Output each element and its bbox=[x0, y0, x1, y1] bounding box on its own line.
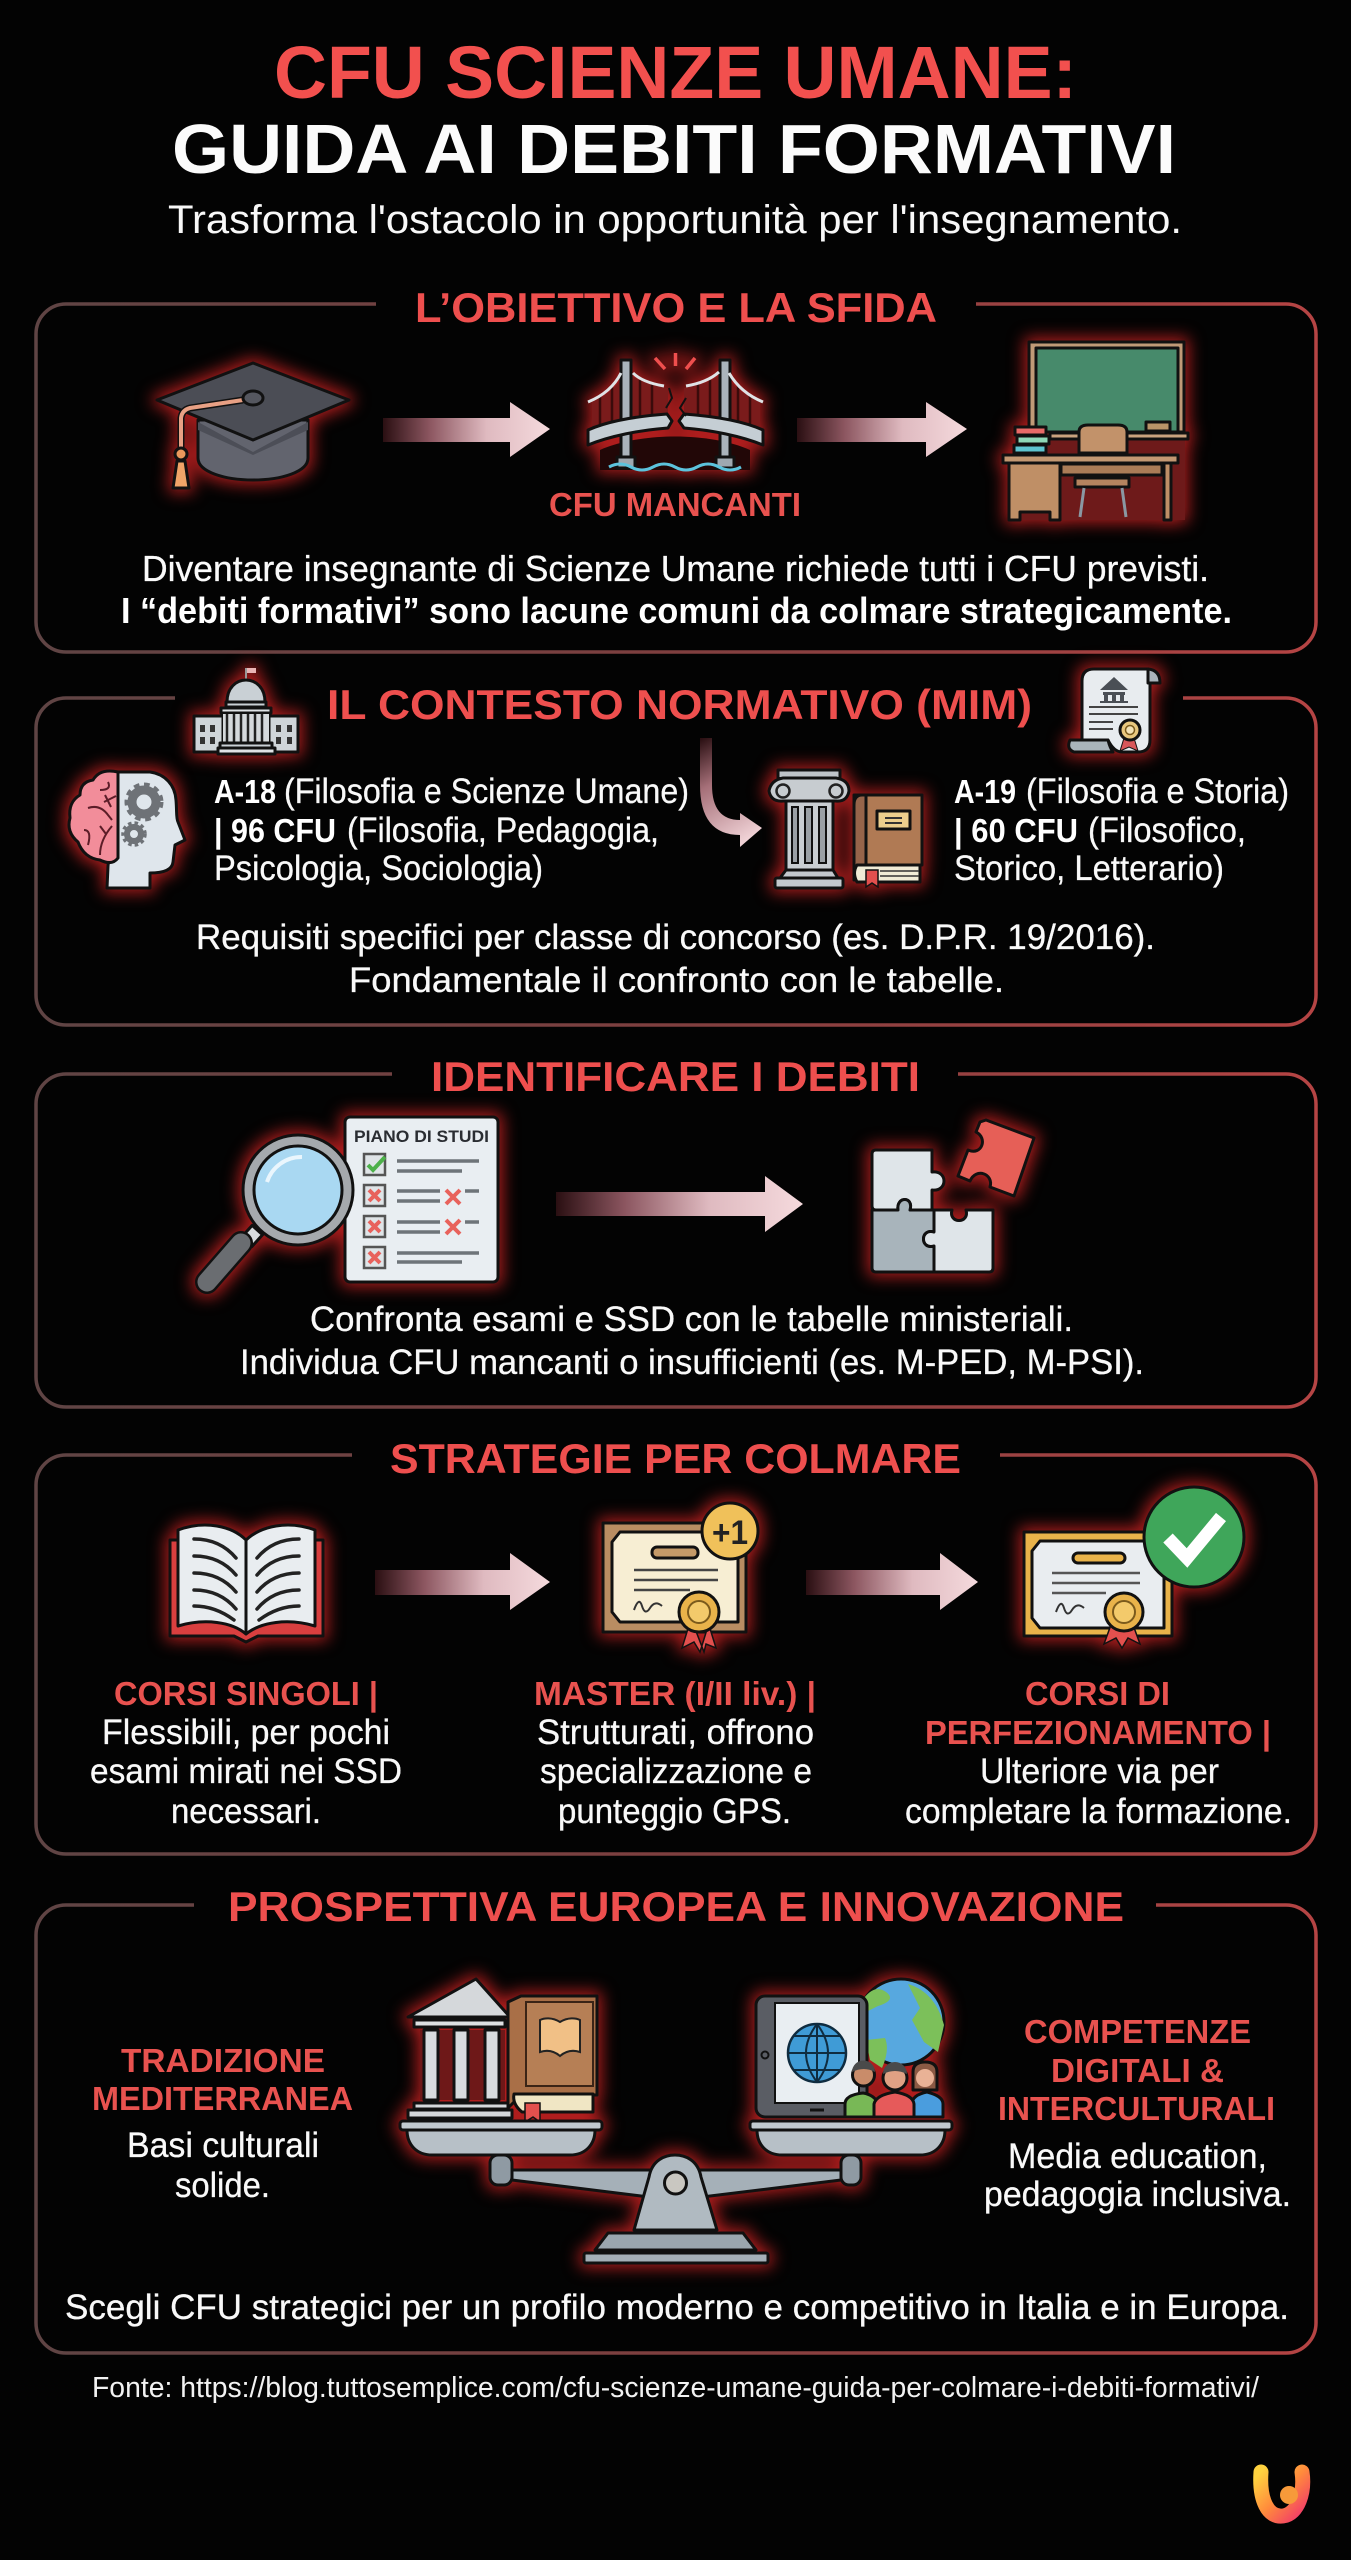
text: requisiti: Requisiti specifici per classe di concorso (es. D.P.R. 19/2016). bbox=[196, 918, 1155, 957]
text: A-18: | 96 CFU bbox=[214, 812, 336, 849]
tablet bbox=[756, 1996, 867, 2117]
text: tradizione mediterranea: solide. bbox=[175, 2166, 270, 2205]
text: A-18 bbox=[214, 772, 689, 888]
text: A-19: Storico, Letterario) bbox=[954, 849, 1224, 888]
icon: magnifier over study plan bbox=[207, 1117, 498, 1282]
arrow: curved bbox=[700, 738, 762, 847]
logo bbox=[1261, 2472, 1303, 2516]
column: master: punteggio GPS. bbox=[558, 1792, 791, 1831]
text: conclusione: Scegli CFU strategici per un profilo moderno e competitivo in Italia e in Europa. bbox=[65, 2288, 1289, 2327]
text: tradizione mediterranea: Basi culturali bbox=[127, 2126, 319, 2165]
column: corsi di perfezionamento: completare la formazione. bbox=[905, 1792, 1292, 1831]
text: A-19: (Filosofia e Storia) bbox=[1026, 772, 1289, 811]
temple bbox=[408, 1979, 512, 2118]
arrow bbox=[556, 1176, 803, 1232]
heading: prospettiva: PROSPETTIVA EUROPEA E INNOVAZIONE bbox=[228, 1883, 1124, 1930]
text: A-19: | 60 CFU bbox=[954, 812, 1078, 849]
text: identificare: Confronta esami e SSD con le tabelle ministeriali. bbox=[310, 1300, 1073, 1339]
icon: column and book bbox=[769, 770, 922, 888]
icon: balance scale bbox=[400, 1979, 952, 2263]
text: requisiti: Fondamentale il confronto con le tabelle. bbox=[349, 961, 1004, 1000]
arrow bbox=[797, 402, 967, 457]
text: obiettivo: Diventare insegnante di Scienze Umane richiede tutti i CFU previsti. bbox=[142, 548, 1209, 589]
column: corsi singoli: esami mirati nei SSD bbox=[90, 1752, 402, 1791]
panel: prospettiva europea bbox=[36, 1883, 1316, 2353]
icon: classroom desk and blackboard bbox=[1003, 342, 1188, 520]
pans and beam bbox=[400, 2121, 952, 2263]
text: competenze digitali: COMPETENZE bbox=[1024, 2013, 1251, 2050]
column: master: MASTER (I/II liv.) | bbox=[534, 1675, 816, 1712]
book on scale bbox=[508, 1996, 597, 2122]
label: CFU mancanti: CFU MANCANTI bbox=[549, 486, 801, 523]
icon: broken bridge bbox=[588, 353, 763, 470]
column: corsi singoli: CORSI SINGOLI | bbox=[114, 1675, 378, 1712]
people bbox=[845, 2060, 943, 2117]
arrow bbox=[383, 402, 550, 457]
subtitle: Trasforma l'ostacolo in opportunità per l'insegnamento. bbox=[168, 198, 1182, 242]
column: corsi di perfezionamento bbox=[905, 1675, 1292, 1831]
panel: contesto normativo bbox=[36, 668, 1316, 1025]
title: CFU SCIENZE UMANE: bbox=[274, 31, 1077, 114]
column: master: Strutturati, offrono bbox=[537, 1713, 814, 1752]
text: obiettivo bbox=[121, 548, 1232, 631]
heading: strategie: STRATEGIE PER COLMARE bbox=[390, 1435, 961, 1482]
heading: identificare: IDENTIFICARE I DEBITI bbox=[431, 1053, 920, 1100]
globe bbox=[858, 1979, 944, 2068]
text: competenze digitali bbox=[984, 2013, 1291, 2214]
icon: puzzle bbox=[872, 1120, 1034, 1272]
arrow bbox=[375, 1553, 550, 1610]
column: corsi singoli: Flessibili, per pochi bbox=[102, 1713, 390, 1752]
text: A-18: A-18 bbox=[214, 773, 276, 810]
column: corsi di perfezionamento: CORSI DI bbox=[1025, 1675, 1170, 1712]
title: GUIDA AI DEBITI FORMATIVI bbox=[172, 110, 1176, 188]
icon: diploma with +1 badge bbox=[603, 1503, 758, 1652]
text: A-19 bbox=[954, 772, 1289, 888]
heading: obiettivo: L’OBIETTIVO E LA SFIDA bbox=[415, 284, 937, 331]
text: A-19: A-19 bbox=[954, 773, 1016, 810]
text: A-18: Psicologia, Sociologia) bbox=[214, 849, 543, 888]
icon: decree scroll bbox=[1069, 669, 1160, 752]
icon: magnifier over study plan: PIANO DI STUDI bbox=[354, 1127, 489, 1146]
text: competenze digitali: INTERCULTURALI bbox=[998, 2090, 1275, 2127]
column: corsi di perfezionamento: Ulteriore via per bbox=[980, 1752, 1219, 1791]
text: identificare bbox=[240, 1300, 1144, 1382]
panel: obiettivo e sfida bbox=[36, 284, 1316, 652]
text: A-19: (Filosofico, bbox=[1088, 811, 1246, 850]
text: tradizione mediterranea: MEDITERRANEA bbox=[92, 2080, 353, 2117]
text: tradizione mediterranea bbox=[92, 2042, 353, 2205]
column: corsi singoli: necessari. bbox=[171, 1792, 321, 1831]
text: obiettivo: I “debiti formativi” sono lacune comuni da colmare strategicamente. bbox=[121, 590, 1232, 631]
arrow bbox=[806, 1553, 978, 1610]
text: tradizione mediterranea: TRADIZIONE bbox=[121, 2042, 325, 2079]
text: A-18: (Filosofia e Scienze Umane) bbox=[284, 772, 689, 811]
text: requisiti bbox=[196, 918, 1155, 1000]
icon: government building bbox=[194, 668, 298, 754]
column: master bbox=[534, 1675, 816, 1831]
heading: contesto: IL CONTESTO NORMATIVO (MIM) bbox=[327, 681, 1032, 728]
title bbox=[172, 31, 1176, 188]
column: corsi singoli bbox=[90, 1675, 402, 1831]
icon: diploma with green check bbox=[1024, 1487, 1244, 1648]
column: corsi di perfezionamento: PERFEZIONAMENTO | bbox=[925, 1714, 1271, 1751]
panel: identificare i debiti bbox=[36, 1053, 1316, 1407]
icon: diploma with +1 badge: +1 bbox=[712, 1514, 748, 1552]
text: competenze digitali: Media education, bbox=[1008, 2137, 1267, 2176]
text: competenze digitali: DIGITALI & bbox=[1051, 2052, 1224, 2089]
icon: head with brain bbox=[69, 771, 185, 888]
panel: strategie per colmare bbox=[36, 1435, 1316, 1854]
icon: open book bbox=[170, 1525, 323, 1642]
text: identificare: Individua CFU mancanti o insufficienti (es. M-PED, M-PSI). bbox=[240, 1343, 1144, 1382]
source: Fonte: https://blog.tuttosemplice.com/cfu-scienze-umane-guida-per-colmare-i-debiti-formativi/ bbox=[92, 2372, 1260, 2404]
column: master: specializzazione e bbox=[540, 1752, 812, 1791]
text: A-18: (Filosofia, Pedagogia, bbox=[347, 811, 659, 850]
text: competenze digitali: pedagogia inclusiva. bbox=[984, 2175, 1291, 2214]
icon: graduation cap bbox=[157, 363, 349, 488]
